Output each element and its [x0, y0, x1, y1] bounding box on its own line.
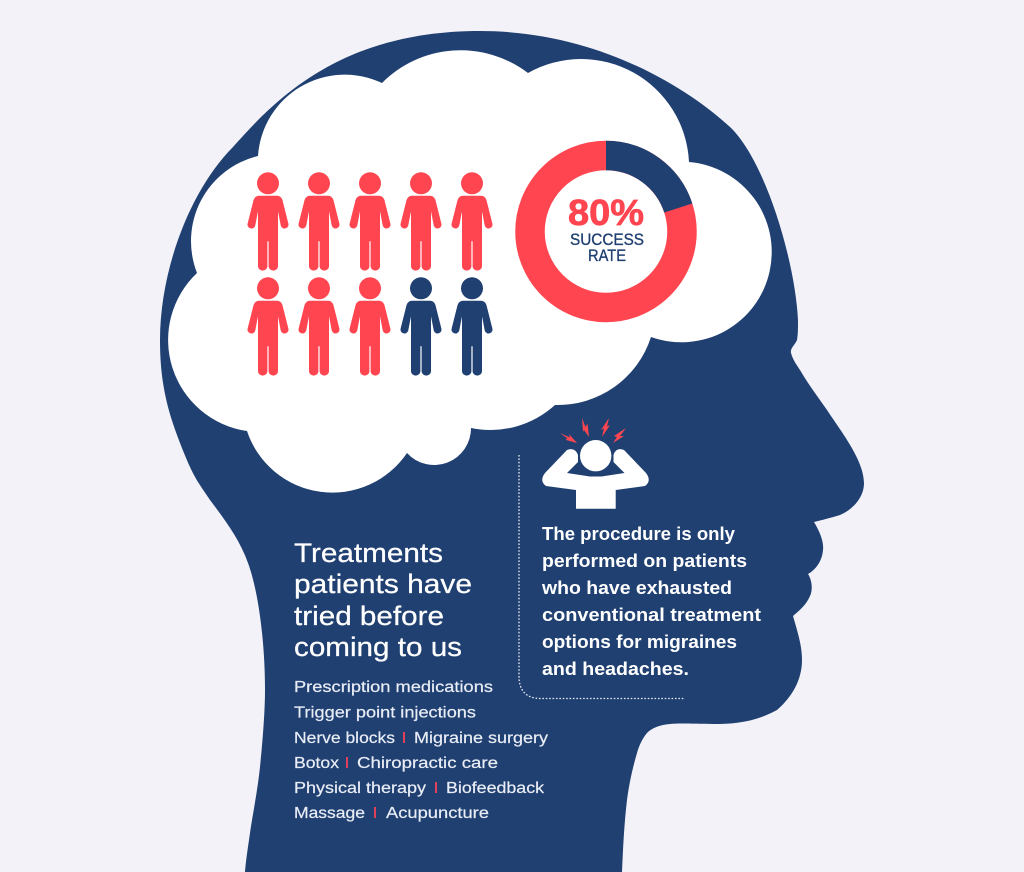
text block: procedure note: options for migraines: [542, 632, 737, 652]
donut chart: 80% success rate: RATE: [588, 246, 626, 265]
list of treatments: Chiropractic care: [357, 755, 498, 772]
list of treatments: Migraine surgery: [414, 730, 548, 747]
text block: procedure note: [541, 524, 761, 679]
list of treatments: Acupuncture: [386, 805, 489, 822]
donut chart: 80% success rate: [530, 155, 682, 308]
thought cloud: [168, 50, 772, 493]
heading: treatments tried: patients have: [294, 569, 472, 599]
list of treatments: Physical therapy: [294, 780, 426, 797]
list of treatments: Botox: [294, 755, 339, 772]
icon: person with headache: [542, 418, 649, 509]
pictogram: ten people, eight red and two navy: [247, 172, 493, 376]
heading: treatments tried: coming to us: [294, 632, 462, 662]
text block: procedure note: and headaches.: [542, 659, 689, 679]
text block: procedure note: who have exhausted: [541, 578, 732, 598]
heading: treatments tried: [294, 538, 472, 662]
heading: treatments tried: tried before: [294, 601, 444, 631]
list of treatments: Prescription medications: [294, 679, 493, 696]
text block: procedure note: conventional treatment: [542, 605, 761, 625]
dotted bracket: [519, 455, 685, 698]
list of treatments: Biofeedback: [446, 780, 544, 797]
list of treatments: Trigger point injections: [294, 704, 476, 722]
text block: procedure note: performed on patients: [542, 551, 747, 571]
list of treatments: [294, 679, 548, 822]
head silhouette: [160, 31, 864, 872]
heading: treatments tried: Treatments: [294, 538, 443, 568]
list of treatments: Nerve blocks: [294, 730, 395, 747]
list of treatments: Massage: [294, 805, 365, 822]
donut chart: 80% success rate: SUCCESS: [570, 230, 644, 249]
donut chart: 80% success rate: 80%: [568, 192, 644, 233]
text block: procedure note: The procedure is only: [542, 524, 735, 544]
